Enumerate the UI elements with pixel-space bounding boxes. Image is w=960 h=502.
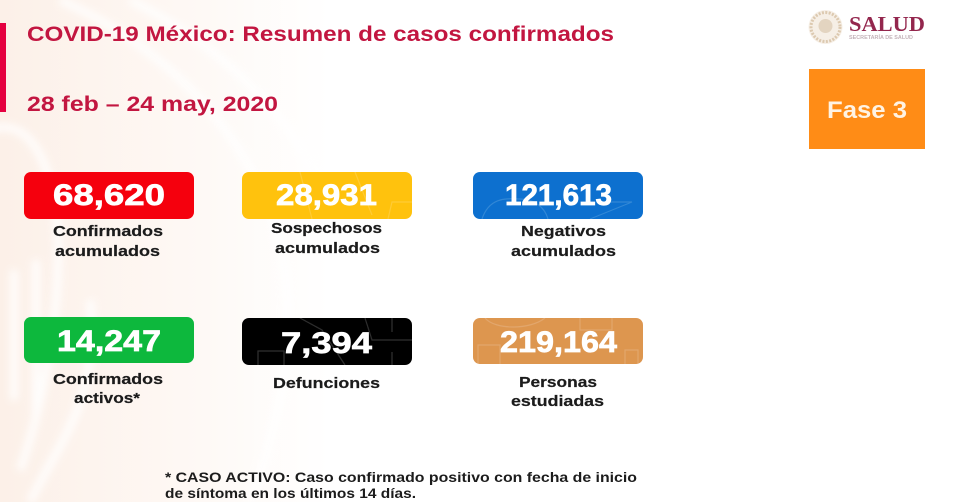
card: confirmados acumulados: Confirmados xyxy=(53,223,163,240)
title: COVID-19 México: Resumen de casos confirmados xyxy=(27,23,614,46)
card: sospechosos acumulados xyxy=(242,172,412,257)
footnote: de síntoma en los últimos 14 días. xyxy=(165,486,416,501)
footnote: * CASO ACTIVO: Caso confirmado positivo con fecha de inicio xyxy=(165,470,637,485)
card: confirmados activos: Confirmados xyxy=(53,371,163,388)
card: confirmados activos xyxy=(24,317,194,407)
card: sospechosos acumulados: Sospechosos xyxy=(271,220,382,237)
card: sospechosos acumulados: acumulados xyxy=(275,240,380,257)
card: negativos acumulados: acumulados xyxy=(511,243,616,260)
logo: Secretaría de Salud xyxy=(808,10,925,44)
card: personas estudiadas: Personas xyxy=(519,374,597,391)
card: personas estudiadas: estudiadas xyxy=(511,393,604,410)
logo wordmark: SALUD xyxy=(849,12,925,36)
card: confirmados activos: 14,247 xyxy=(57,325,161,358)
card: personas estudiadas: 219,164 xyxy=(500,326,617,359)
card: negativos acumulados: Negativos xyxy=(521,223,606,240)
card: defunciones: 7,394 xyxy=(281,327,372,360)
phase badge xyxy=(809,69,925,149)
card: confirmados acumulados: 68,620 xyxy=(53,179,165,212)
footnote xyxy=(165,470,637,501)
logo subtitle: SECRETARÍA DE SALUD xyxy=(849,33,913,41)
card: negativos acumulados: 121,613 xyxy=(505,179,612,212)
card: confirmados acumulados xyxy=(24,172,194,260)
card: personas estudiadas xyxy=(473,318,643,410)
card: confirmados acumulados: acumulados xyxy=(55,243,160,260)
card: confirmados activos: activos* xyxy=(74,390,140,407)
card: negativos acumulados xyxy=(473,172,643,260)
background watermark xyxy=(0,0,345,502)
card: defunciones xyxy=(242,318,412,392)
icon: national emblem xyxy=(808,10,842,44)
date range: 28 feb – 24 may, 2020 xyxy=(27,93,278,116)
accent bar xyxy=(0,23,6,112)
phase badge: Fase 3 xyxy=(827,97,907,124)
card: defunciones: Defunciones xyxy=(273,375,380,392)
card: sospechosos acumulados: 28,931 xyxy=(276,179,377,212)
